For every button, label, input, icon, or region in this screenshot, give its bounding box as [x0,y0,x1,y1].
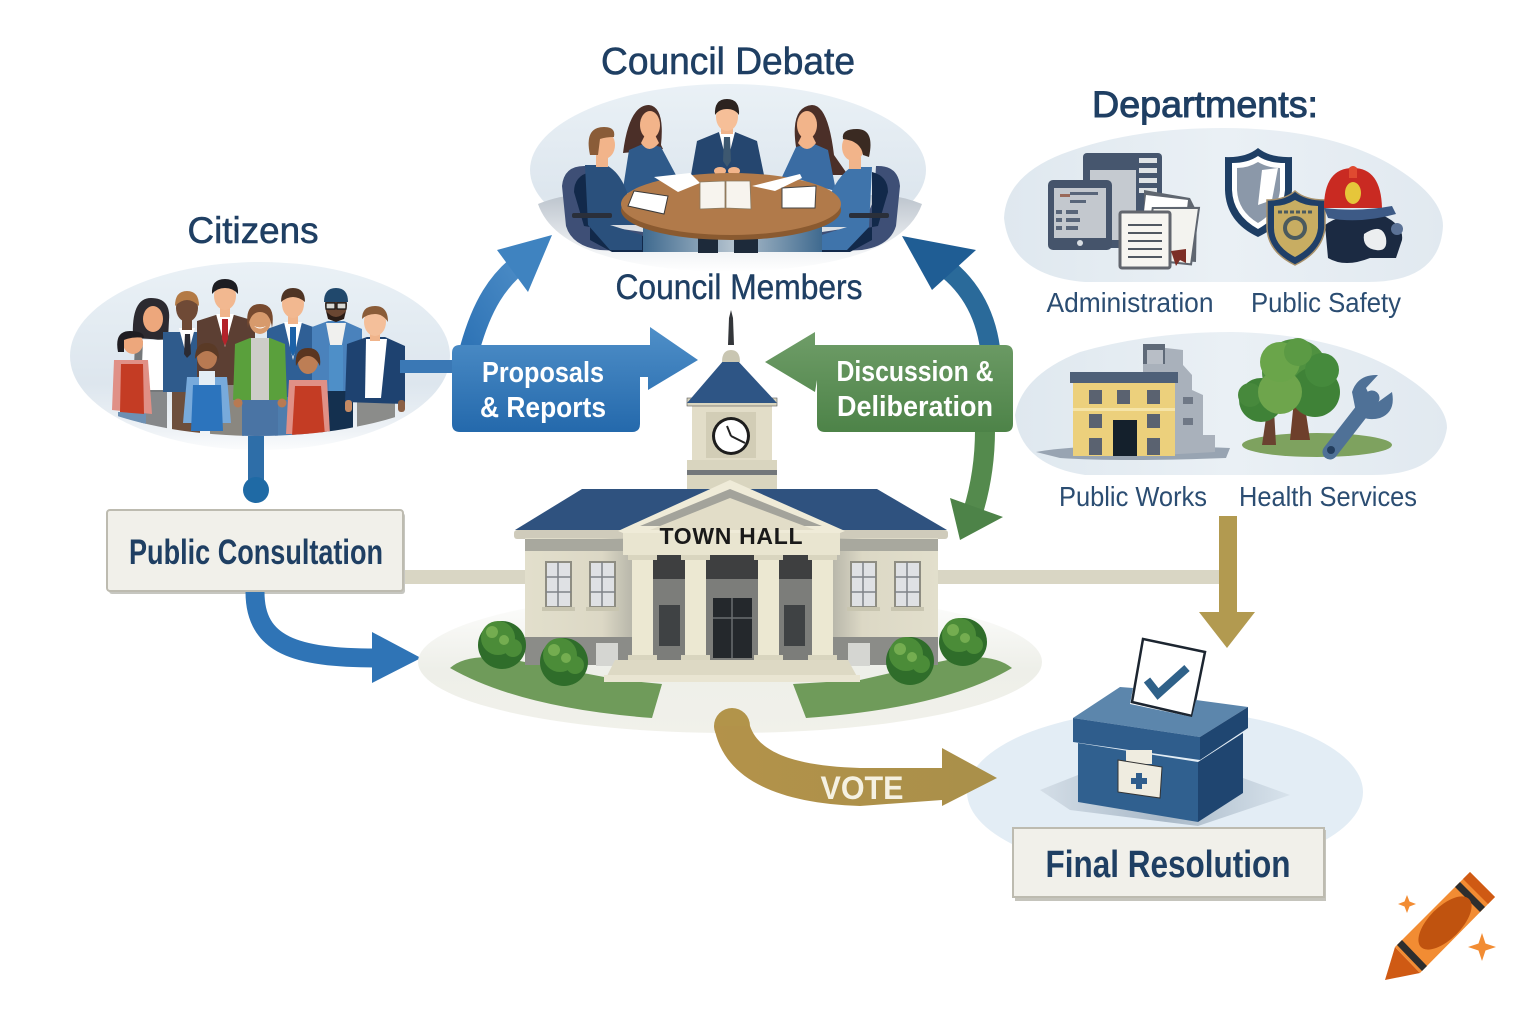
arrow: up to council left [470,235,552,348]
boy blue overalls [183,343,231,431]
icon: public safety [1225,148,1403,265]
council table [621,173,841,253]
box: public consultation: Public Consultation [129,533,383,572]
arrow: green down to town hall [950,430,1003,540]
icon: public works building [1036,344,1230,460]
beige connector lines [403,570,1228,584]
box: final resolution: Final Resolution [1046,844,1290,886]
callout: discussion and deliberation: Deliberation [837,391,993,423]
clock [712,417,750,455]
callout: proposals and reports: Proposals [482,357,604,389]
callout: proposals and reports [452,327,698,432]
girl red vest [112,331,152,434]
panel: departments top [1004,128,1443,282]
icon: crayon logo [1385,872,1496,980]
citizens group illustration [112,279,405,446]
arrow: vote [714,708,997,806]
callout: discussion and deliberation [765,332,1013,432]
town hall grounds [418,591,1042,733]
label: Public Works: Public Works [1059,481,1207,512]
columns [632,560,833,656]
steps [604,660,860,682]
callout: proposals and reports: & Reports [480,392,606,424]
ballot paper [1132,639,1205,716]
girl red vest front [286,348,330,436]
icon: health services tree and wrench [1238,338,1393,457]
label: Health Services: Health Services [1239,481,1417,512]
callout: discussion and deliberation: Discussion & [836,356,994,388]
man blue suit [267,288,313,436]
councillor woman left [622,105,677,195]
windows [546,562,920,607]
panel: departments bottom [1015,332,1447,475]
icon: administration [1048,153,1199,268]
label: Public Safety: Public Safety [1251,287,1401,318]
building: town hall [478,310,987,686]
arrow: up to council right [902,236,990,348]
man glasses [312,288,362,437]
heading: Citizens: Citizens [188,210,318,251]
connector: citizens to proposals [400,360,456,373]
panel: final resolution [967,639,1363,901]
walls [525,538,635,638]
councillor man left [572,127,646,250]
arrow: consultation to town hall [255,592,421,683]
ballot box [1040,639,1290,826]
councillor woman right [782,105,848,191]
man navy jacket [345,306,405,427]
panel: council debate [530,84,926,272]
box: public consultation [107,510,405,594]
portico [653,555,812,661]
clock tower [687,350,777,498]
connector: citizens to public consultation [243,436,269,503]
heading: Departments: Departments: [1092,84,1318,125]
chair right [822,166,900,252]
man green jacket [233,304,287,440]
main roof [515,489,947,530]
panel: citizens [70,262,450,450]
shrubs [478,618,987,686]
woman white shirt [132,298,170,428]
man dark suit [163,291,200,433]
chair left [562,166,643,252]
box: final resolution [1013,828,1326,901]
label: Administration: Administration [1046,287,1214,318]
tall man brown suit [197,279,255,437]
councillor centre [691,99,764,175]
arrow: departments to final resolution [1199,516,1255,648]
heading: Council Members: Council Members [616,268,862,307]
councillor man right [809,129,889,250]
arrow: vote: VOTE [820,770,904,806]
spire [728,310,734,345]
pediment [623,530,840,555]
heading: Council Debate: Council Debate [601,41,855,83]
town hall sign: TOWN HALL [660,523,802,549]
